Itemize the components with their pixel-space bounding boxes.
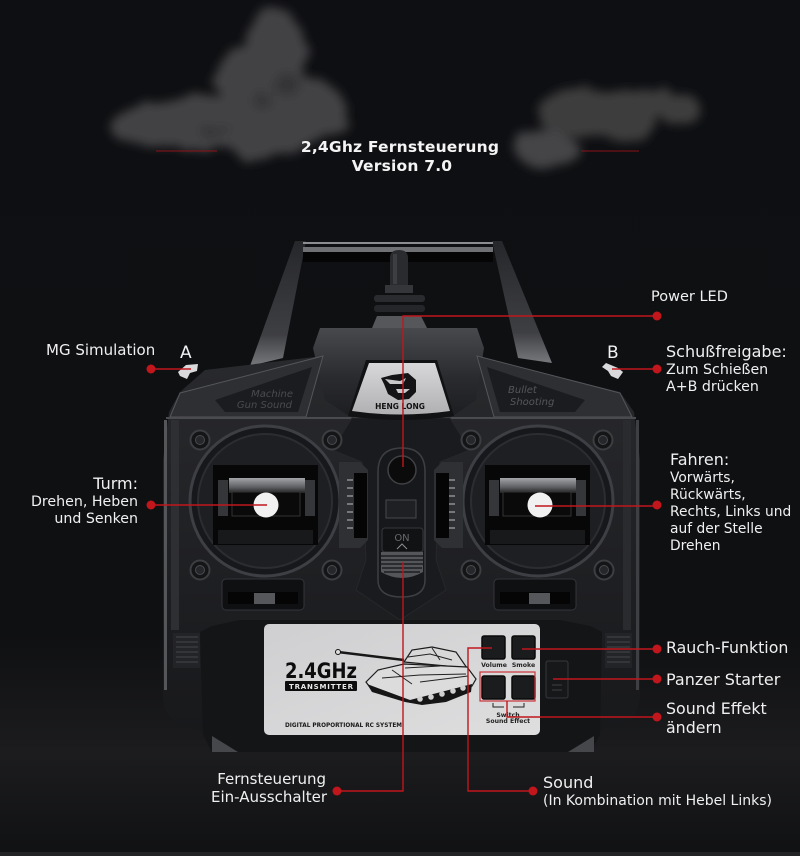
gimbal frame screws bbox=[190, 430, 342, 580]
callout: MG Simulation: MG Simulation bbox=[46, 341, 155, 359]
left horizontal trim bbox=[222, 579, 304, 610]
callout: Turm bbox=[31, 474, 267, 527]
button smoke bbox=[512, 636, 535, 669]
drum bbox=[500, 478, 576, 493]
smoke cloud right bbox=[513, 86, 698, 165]
side switch B: B bbox=[607, 343, 619, 363]
2.4GHz logo: TRANSMITTER bbox=[289, 683, 354, 691]
tank illustration bbox=[336, 647, 476, 705]
stick top bbox=[254, 492, 278, 518]
side switch B bbox=[602, 343, 623, 379]
left shoulder inset: Machine bbox=[251, 389, 293, 400]
callout: Turm: Turm: bbox=[92, 474, 138, 493]
antenna bbox=[372, 250, 427, 331]
smoke cloud left bbox=[110, 12, 344, 158]
callout: Fahren: Fahren: bbox=[670, 450, 729, 469]
title: 2,4Ghz Fernsteuerung bbox=[301, 138, 499, 156]
power LED bbox=[388, 456, 416, 484]
transmitter body bbox=[163, 328, 640, 752]
callout: Rauch-Funktion bbox=[522, 638, 788, 657]
HENG LONG logo plate bbox=[348, 360, 454, 420]
on switch bbox=[381, 528, 423, 578]
2.4GHz logo bbox=[285, 659, 357, 691]
callout: Turm: Drehen, Heben bbox=[31, 494, 138, 510]
callout: Fahren: Vorwärts, bbox=[670, 470, 735, 486]
label sticker bbox=[264, 624, 540, 735]
callout: Sound Effekt: Sound Effekt bbox=[666, 699, 767, 718]
callout: Sound Effekt bbox=[480, 672, 767, 737]
drum bbox=[229, 478, 305, 493]
button volume: Volume bbox=[481, 662, 507, 669]
callout: Fernsteuerung bbox=[211, 562, 403, 806]
callout: Fahren bbox=[535, 450, 791, 554]
stick top bbox=[528, 492, 552, 518]
sound switch buttons: Switch bbox=[496, 712, 520, 719]
right vertical trim bbox=[434, 462, 463, 548]
left vertical trim bbox=[339, 462, 368, 548]
callout: Fahren: Rechts, Links und bbox=[670, 504, 791, 520]
system caption: DIGITAL PROPORTIONAL RC SYSTEM bbox=[285, 722, 402, 729]
callout: Panzer Starter bbox=[553, 670, 781, 689]
transmitter handle bbox=[250, 241, 552, 366]
side switch A bbox=[178, 343, 198, 379]
callout: Schussfreigabe bbox=[612, 342, 787, 395]
sound switch buttons: Sound Effect bbox=[486, 718, 530, 725]
left shoulder inset: Gun Sound bbox=[237, 400, 293, 411]
callout: Sound bbox=[468, 648, 772, 809]
callout: Schussfreigabe: A+B drücken bbox=[666, 379, 759, 395]
callout: Sound Effekt: ändern bbox=[666, 718, 722, 737]
left shoulder panel bbox=[170, 356, 323, 417]
sound switch buttons bbox=[482, 676, 535, 725]
callout: Panzer Starter: Panzer Starter bbox=[666, 670, 781, 689]
tank starter button bbox=[546, 661, 568, 698]
decorative red title rules bbox=[156, 150, 639, 152]
callout: Turm: und Senken bbox=[54, 511, 138, 527]
gimbal frame screws bbox=[462, 430, 614, 580]
title: Version 7.0 bbox=[352, 157, 452, 175]
left gimbal bbox=[190, 426, 342, 580]
right gimbal bbox=[462, 426, 614, 580]
callout: Fahren: Drehen bbox=[670, 538, 720, 554]
button volume bbox=[481, 636, 507, 669]
2.4GHz logo: 2.4GHz bbox=[285, 659, 357, 683]
right horizontal trim bbox=[494, 579, 576, 610]
callout: Power LED bbox=[403, 289, 728, 467]
on switch: ON bbox=[394, 533, 410, 544]
callout: Fahren: auf der Stelle bbox=[670, 521, 763, 537]
centre bowl around switch bbox=[332, 418, 470, 620]
top centre shell bbox=[313, 328, 484, 418]
right shoulder panel bbox=[477, 356, 632, 417]
centre column with LED and power switch bbox=[378, 448, 425, 597]
left shoulder inset bbox=[215, 367, 312, 412]
HENG LONG logo plate: HENG LONG bbox=[375, 402, 425, 411]
bottom edge strip bbox=[0, 852, 800, 856]
callout: Power LED: Power LED bbox=[651, 289, 728, 305]
callout: MG Simulation bbox=[46, 341, 191, 374]
side switch A: A bbox=[180, 343, 192, 363]
lower control panel bbox=[173, 620, 632, 752]
callout: Schussfreigabe: Schußfreigabe: bbox=[666, 342, 787, 361]
callout: Fernsteuerung: Ein-Ausschalter bbox=[211, 788, 328, 806]
callout: Sound: Sound bbox=[543, 773, 593, 792]
callout: Fahren: Rückwärts, bbox=[670, 487, 746, 503]
callout: Sound: (In Kombination mit Hebel Links) bbox=[543, 793, 772, 809]
button smoke: Smoke bbox=[512, 662, 535, 669]
right shoulder inset: Shooting bbox=[510, 397, 554, 408]
right shoulder inset: Bullet bbox=[508, 385, 538, 396]
title bbox=[301, 138, 499, 175]
right shoulder inset bbox=[487, 367, 585, 412]
callout: Rauch-Funktion: Rauch-Funktion bbox=[666, 638, 788, 657]
callout: Schussfreigabe: Zum Schießen bbox=[666, 362, 768, 378]
callout: Fernsteuerung: Fernsteuerung bbox=[217, 770, 326, 788]
